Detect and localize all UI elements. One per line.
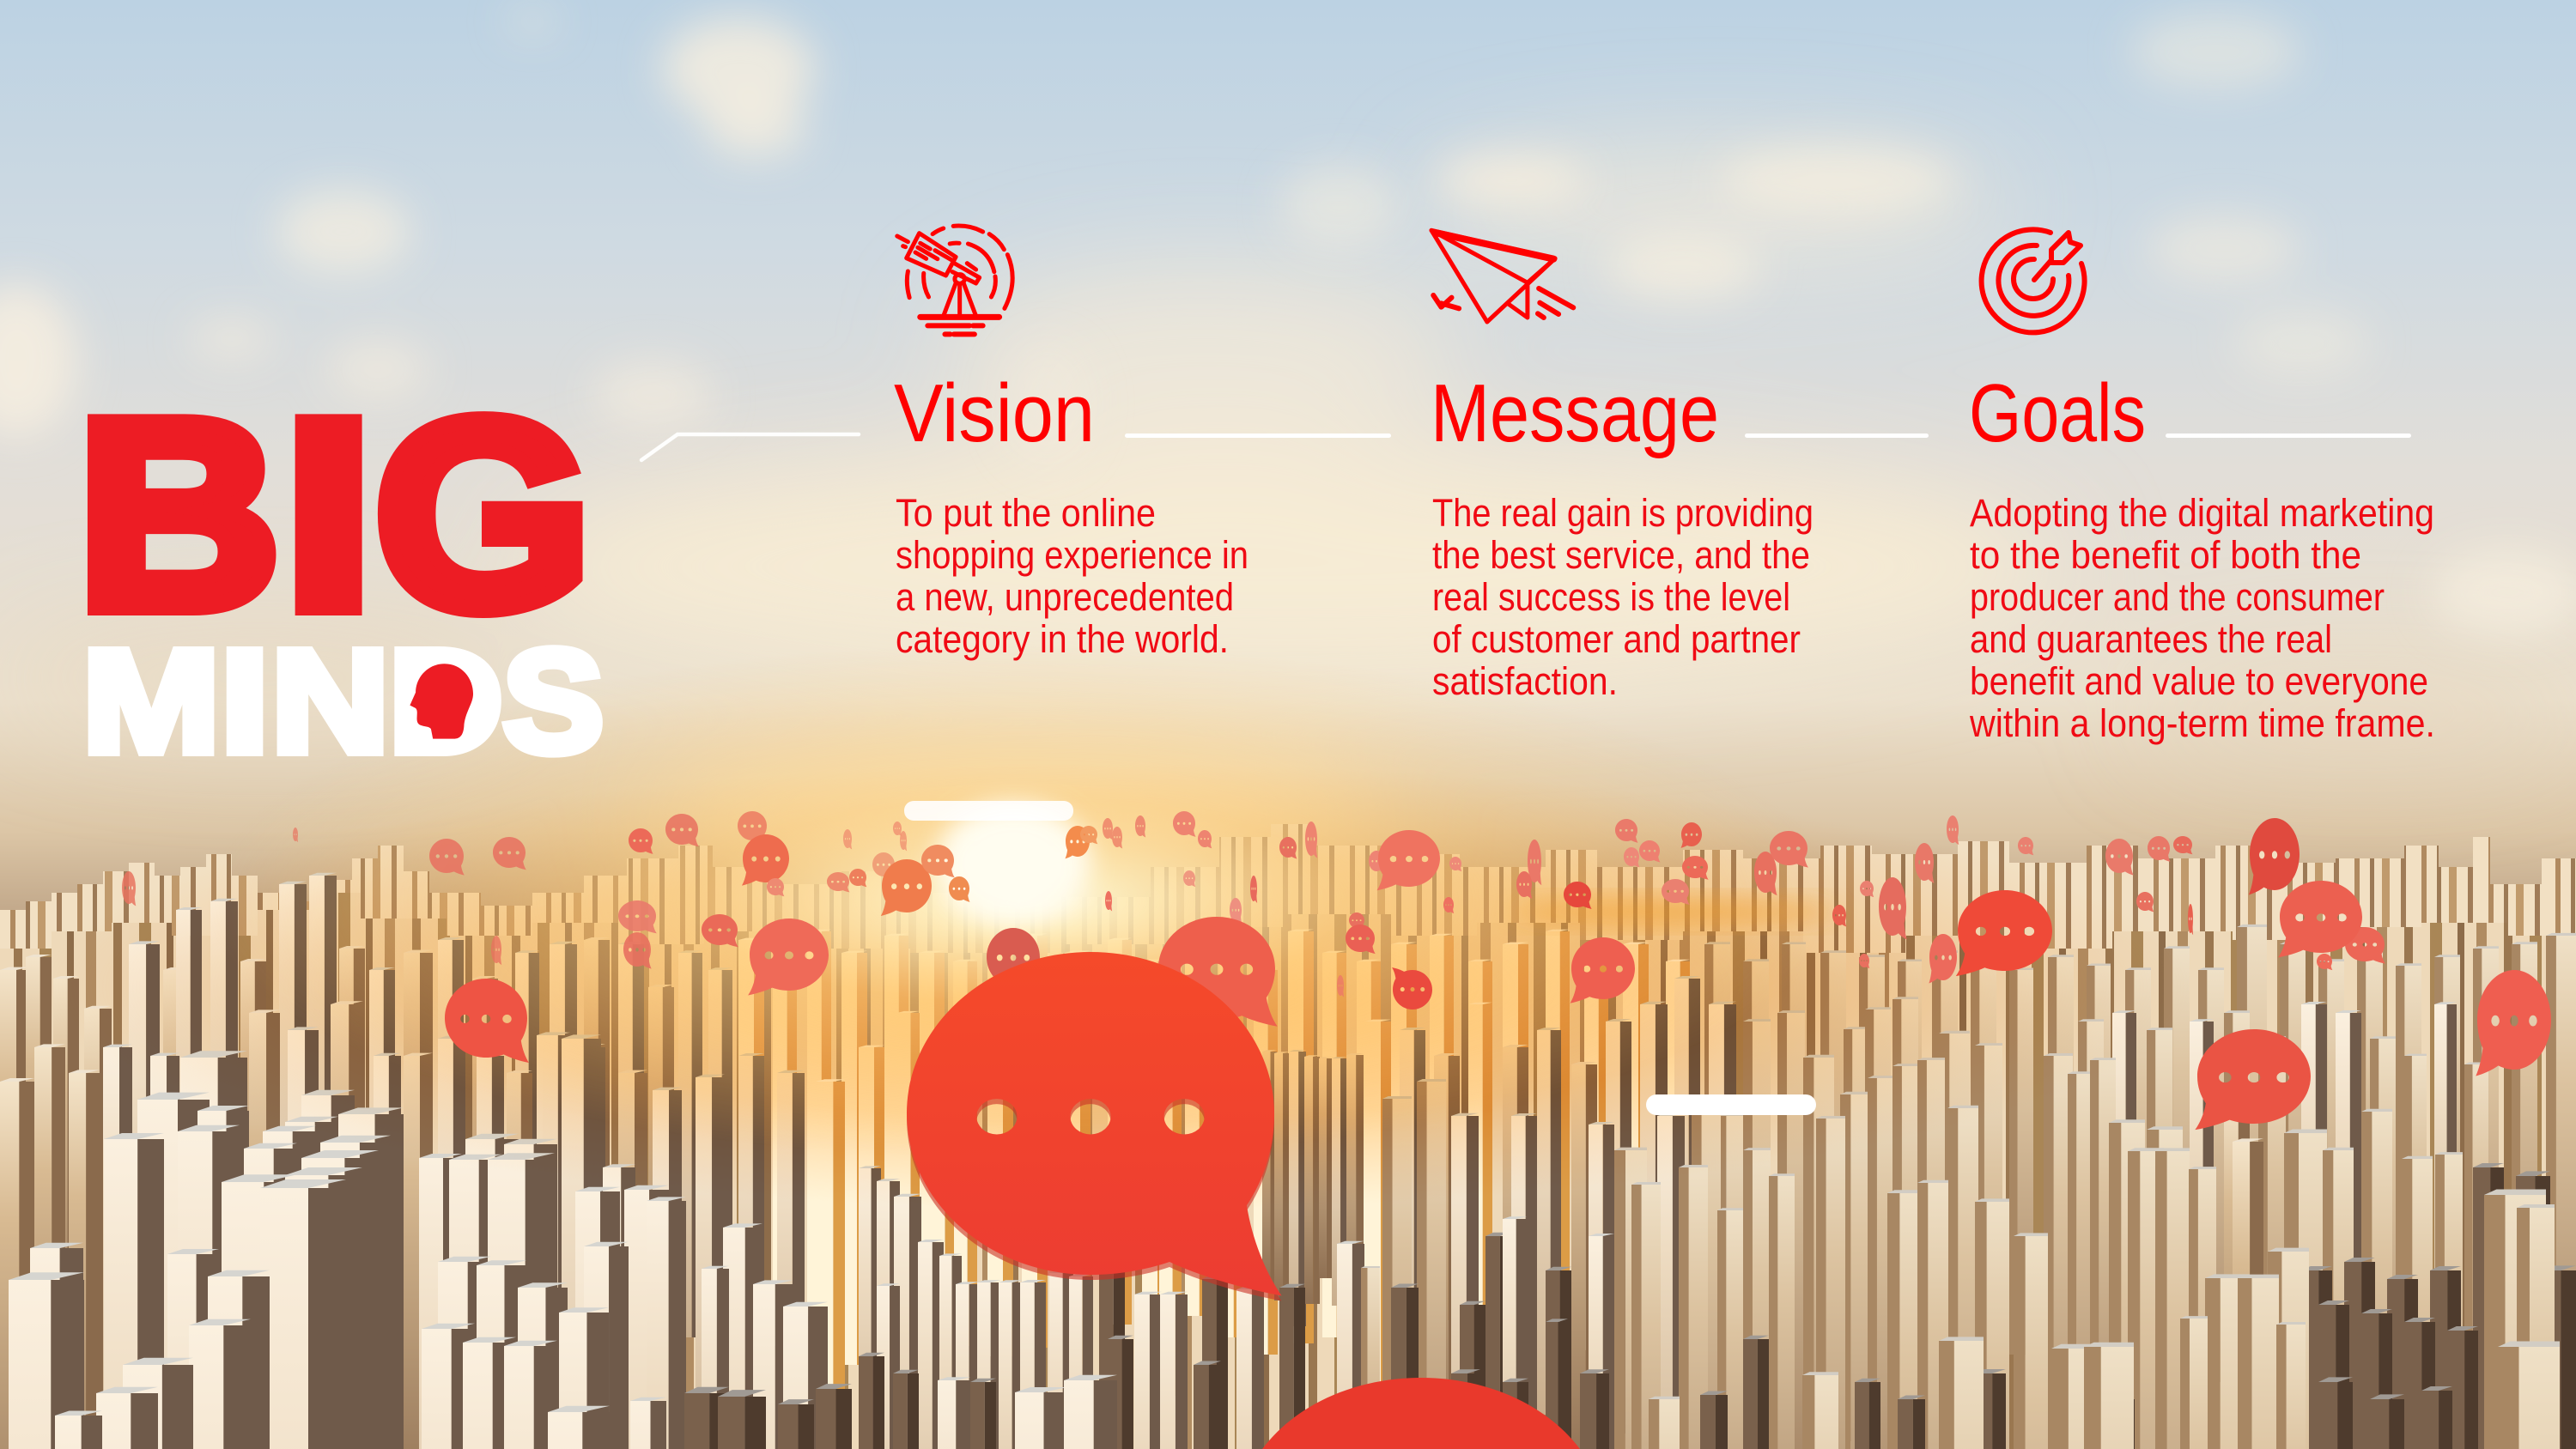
bubble right, side on bbox=[1929, 934, 1957, 984]
panel: goals bbox=[1969, 229, 2435, 745]
heading: Goals: Goals bbox=[1969, 367, 2146, 459]
body: goals: to the benefit of both the bbox=[1970, 533, 2361, 577]
BIG: B bbox=[78, 364, 280, 664]
bottom bubble bbox=[1262, 1378, 1580, 1449]
body: vision: category in the world. bbox=[896, 617, 1229, 661]
left connector line bbox=[641, 434, 859, 460]
logo: BIG MINDS bbox=[78, 364, 604, 783]
MINDS: S bbox=[503, 619, 604, 783]
body: goals: and guarantees the real bbox=[1970, 617, 2332, 661]
icon: paper plane bbox=[1431, 230, 1573, 322]
bubble far right bbox=[2476, 970, 2551, 1076]
body: goals: benefit and value to everyone bbox=[1970, 659, 2428, 703]
body: goals: Adopting the digital marketing bbox=[1970, 491, 2434, 535]
rule bbox=[1745, 433, 1929, 438]
building base shadow bbox=[0, 961, 2576, 1449]
icon: target bbox=[1982, 229, 2085, 332]
bubble behind main, right bbox=[1158, 917, 1278, 1027]
MINDS: D bbox=[389, 621, 503, 783]
body: message: of customer and partner bbox=[1432, 617, 1801, 661]
rule bbox=[2166, 433, 2411, 438]
white bar top bbox=[904, 801, 1073, 821]
sky background bbox=[0, 0, 2576, 944]
heading: Message: Message bbox=[1431, 367, 1719, 459]
rule bbox=[1125, 433, 1391, 438]
panel: vision bbox=[894, 226, 1391, 661]
icon: telescope bbox=[897, 226, 1012, 334]
MINDS bbox=[82, 619, 604, 783]
BIG: G bbox=[375, 366, 591, 664]
speech bubbles, mid bbox=[445, 818, 2551, 1130]
body: goals: producer and the consumer bbox=[1970, 575, 2385, 619]
MINDS: I bbox=[221, 620, 269, 783]
bubble tall right bbox=[2249, 818, 2300, 894]
heading: Vision: Vision bbox=[894, 367, 1095, 459]
white bar lower bbox=[1646, 1094, 1816, 1115]
bubble upper right bbox=[2278, 881, 2362, 957]
body: message: satisfaction. bbox=[1432, 659, 1618, 703]
body: message: The real gain is providing bbox=[1432, 491, 1814, 535]
floating speech bubbles, far bbox=[122, 811, 2385, 997]
body: vision: a new, unprecedented bbox=[896, 575, 1234, 619]
bubble centre right bbox=[1571, 937, 1635, 1003]
BIG bbox=[78, 364, 591, 664]
bubble behind main, left bbox=[987, 928, 1041, 990]
bubble bright right bbox=[1956, 890, 2052, 976]
body: message bbox=[1432, 491, 1814, 703]
MINDS: M bbox=[82, 621, 220, 783]
body: vision bbox=[896, 491, 1249, 661]
bubble lower right bbox=[2195, 1029, 2311, 1130]
panel: message bbox=[1431, 230, 1929, 703]
body: message: real success is the level bbox=[1432, 575, 1790, 619]
body: message: the best service, and the bbox=[1432, 533, 1810, 577]
bubble small centre bbox=[1392, 967, 1432, 1009]
bubble left bbox=[445, 979, 529, 1063]
bubble upper left bbox=[748, 919, 829, 995]
body: goals bbox=[1969, 491, 2435, 745]
main speech bubble bbox=[907, 952, 1282, 1300]
body: vision: shopping experience in bbox=[896, 533, 1249, 577]
BIG: I bbox=[284, 365, 374, 664]
body: goals: within a long-term time frame. bbox=[1969, 701, 2435, 745]
icon: head bbox=[410, 664, 473, 739]
MINDS: N bbox=[271, 621, 389, 783]
body: vision: To put the online bbox=[896, 491, 1156, 535]
